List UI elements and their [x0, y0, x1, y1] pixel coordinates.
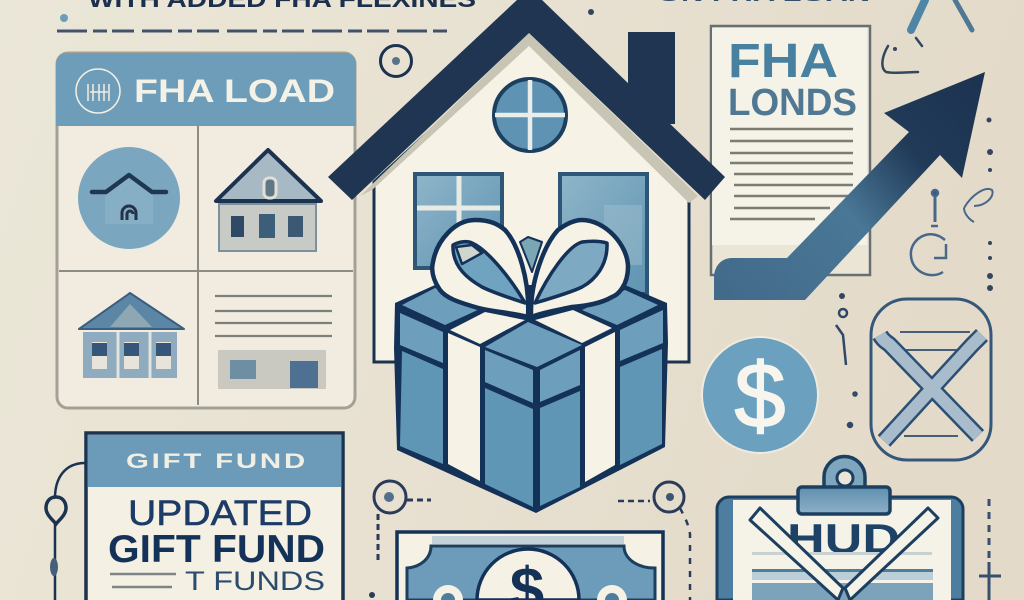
left window — [415, 174, 502, 268]
connector: gift panel left with pin — [46, 463, 85, 600]
clipboard sheet — [733, 500, 951, 600]
house body — [374, 40, 689, 362]
panel: FHA load — [56, 53, 356, 408]
text lines block — [215, 296, 332, 336]
document text lines — [730, 129, 853, 219]
right loop — [531, 220, 628, 317]
dashed rule under the title — [57, 30, 452, 32]
left opening upper tint — [456, 245, 482, 264]
document title: FHA — [728, 35, 838, 88]
icon: top right tools — [882, 0, 972, 73]
round window — [494, 79, 566, 151]
chimney — [628, 32, 675, 124]
note side dots — [433, 585, 627, 600]
document sheet — [712, 28, 867, 245]
icon: dollar coin: $ — [734, 345, 786, 447]
left loop opening — [453, 242, 525, 303]
headline line one: UPDATED — [128, 494, 312, 533]
right window — [560, 174, 647, 294]
image placeholder block — [218, 350, 326, 389]
HUD label: HUD — [787, 515, 900, 562]
vertical ribbons — [448, 332, 615, 482]
connector: dotted plus right — [979, 499, 1001, 600]
note outline — [397, 532, 663, 600]
bow knot — [520, 237, 542, 272]
note top strip — [432, 536, 624, 544]
icon: dollar coin — [701, 336, 819, 454]
connector: ring with dotted trail right — [618, 482, 690, 600]
document subtitle: LONDS — [728, 82, 857, 124]
banknote — [397, 532, 663, 600]
headline line three: T FUNDS — [185, 566, 325, 596]
gift box — [394, 220, 668, 513]
lid side panels — [400, 310, 663, 403]
left loop — [432, 220, 528, 317]
arrow: rising trend — [714, 72, 985, 300]
roof under-shadow — [360, 33, 698, 203]
clipboard: HUD — [717, 456, 963, 600]
clipboard clip base — [798, 487, 890, 514]
roof — [328, 0, 725, 200]
icon: three-window house — [79, 293, 184, 378]
icon: bell and hook doodle — [911, 189, 993, 275]
headline line two: GIFT FUND — [108, 528, 325, 571]
header label: GIFT FUND — [126, 450, 308, 473]
panel outline — [86, 433, 343, 600]
clipboard clip loop — [824, 456, 865, 490]
box side panels — [400, 349, 662, 507]
grid dividers — [59, 126, 353, 405]
icon: round house badge — [78, 147, 180, 249]
lid top pieces — [402, 288, 658, 367]
note centre seal — [477, 549, 579, 600]
icon: ring target — [380, 46, 412, 76]
decoration: dotted trail right — [588, 9, 993, 299]
panel: gift fund — [86, 433, 343, 600]
connector: ring with dotted trail — [369, 481, 431, 598]
clipboard bands — [752, 552, 933, 600]
lid ribbon bands — [450, 310, 612, 344]
smudged strike — [110, 574, 176, 587]
box silhouette — [394, 285, 668, 513]
check mark cross — [750, 508, 938, 600]
connector: vertical dotted pin — [836, 309, 856, 427]
icon: small pin dot — [60, 14, 68, 22]
header label: FHA LOAD — [134, 73, 335, 109]
icon: crossed ribbon badge — [871, 299, 991, 460]
right loop opening — [535, 241, 607, 303]
note inner field — [407, 546, 655, 600]
gift fund header bar — [88, 435, 341, 487]
icon: house with gable — [216, 150, 321, 251]
bow — [432, 220, 628, 317]
document: FHA londs — [711, 26, 870, 275]
panel header bar — [56, 53, 356, 126]
house illustration — [328, 0, 725, 362]
header badge icon — [76, 69, 120, 113]
